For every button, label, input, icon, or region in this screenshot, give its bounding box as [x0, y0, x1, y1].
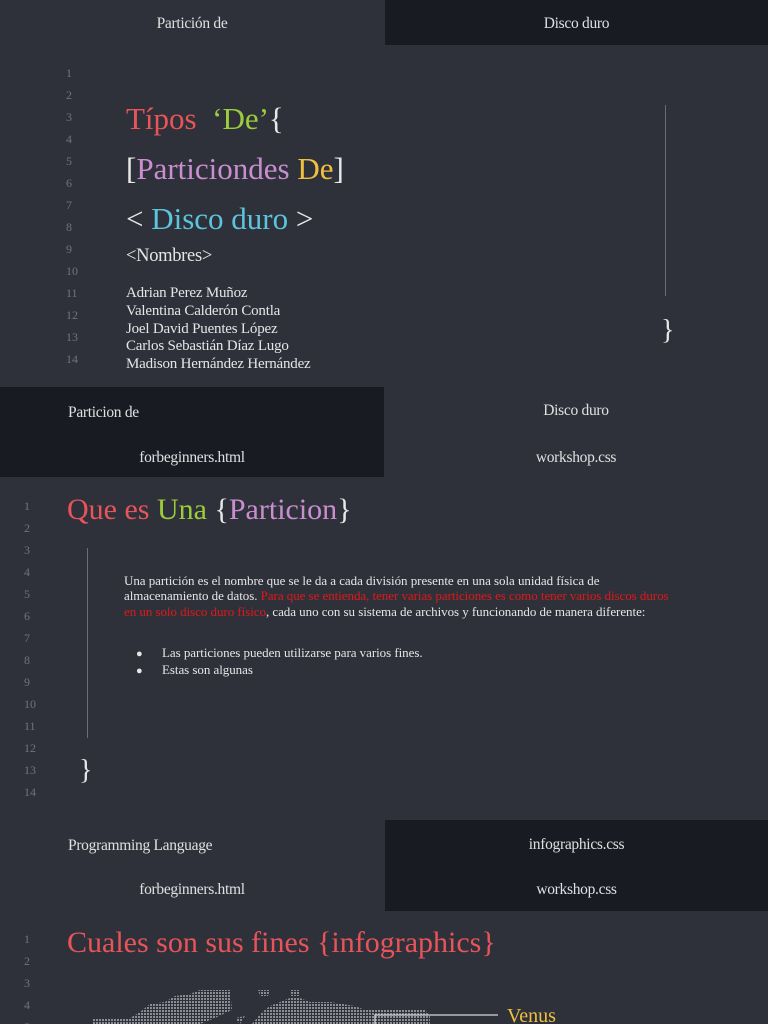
tab: Partición de: Partición de [157, 15, 227, 32]
line numbers: section 2: 3 [24, 543, 30, 557]
line numbers: section 2: 6 [24, 609, 30, 623]
line numbers: section 3 [24, 932, 30, 1024]
tab: Disco duro [385, 0, 768, 45]
closing brace: } [661, 315, 674, 346]
line numbers: section 2: 7 [24, 631, 30, 645]
tab: Programming Language: forbeginners.html [139, 881, 245, 898]
title block: Tipos de particiones: < Disco duro > [126, 201, 313, 236]
tab: Programming Language: Programming Language [68, 837, 212, 854]
line numbers: section 1: 11 [66, 286, 78, 300]
tab: Disco duro [536, 402, 616, 466]
line numbers: section 2: 1 [24, 499, 30, 513]
bullet list: ● [136, 665, 143, 677]
line numbers: section 1: 2 [66, 88, 72, 102]
line numbers: section 1: 9 [66, 242, 72, 256]
line numbers: section 1: 1 [66, 66, 72, 80]
tab: infographics.css [385, 820, 768, 911]
tab bar: top [157, 0, 768, 45]
tab: Particion de [0, 387, 384, 477]
line numbers: section 2: 4 [24, 565, 30, 579]
line numbers: section 3: 3 [24, 976, 30, 990]
tab: infographics.css: infographics.css [529, 836, 624, 853]
text block: definition: en un solo disco duro físico, cada uno con su sistema de archivos y funcionando de manera diferente: [124, 604, 645, 619]
line numbers: section 3: 1 [24, 932, 30, 946]
text block: names: Valentina Calderón Contla [126, 303, 280, 319]
line numbers: section 1: 10 [66, 264, 78, 278]
title: Que es una particion: Que es Una {Particion} [67, 493, 352, 526]
bullet list: Las particiones pueden utilizarse para varios fines. [162, 645, 423, 660]
tab: Programming Language [68, 837, 245, 898]
tab bar: middle 2 [68, 820, 768, 911]
title block: Tipos de particiones [126, 101, 344, 236]
line numbers: section 2: 13 [24, 763, 36, 777]
text block: names: Joel David Puentes López [126, 321, 277, 337]
tab: infographics.css: workshop.css [536, 881, 617, 898]
bullet list: ● [136, 648, 143, 660]
line numbers: section 2: 11 [24, 719, 36, 733]
line numbers: section 1: 7 [66, 198, 72, 212]
line numbers: section 2: 5 [24, 587, 30, 601]
tab: Particion de: forbeginners.html [139, 449, 245, 466]
line numbers: section 1: 14 [66, 352, 78, 366]
line numbers: section 2: 9 [24, 675, 30, 689]
line numbers: section 2: 8 [24, 653, 30, 667]
line numbers: section 1 [66, 66, 78, 366]
tab: Disco duro: Disco duro [544, 15, 609, 32]
line numbers: section 3: 2 [24, 954, 30, 968]
title: Cuales son sus fines: Cuales son sus fines {infographics} [67, 926, 496, 959]
tab: Disco duro: workshop.css [536, 449, 616, 466]
title block: Tipos de particiones: [Particiondes De] [126, 151, 344, 186]
tab: Disco duro: Disco duro [543, 402, 609, 419]
title block: Tipos de particiones: Típos ‘De’{ [126, 101, 284, 136]
text block: names [126, 285, 311, 372]
bullet list [136, 645, 423, 677]
text block: definition: Una partición es el nombre que se le da a cada división presente en una sola unidad física de [124, 573, 599, 588]
closing brace: } [79, 755, 92, 786]
line numbers: section 3: 4 [24, 998, 30, 1012]
line numbers: section 2: 10 [24, 697, 36, 711]
tab bar: middle 1 [0, 387, 616, 477]
heading: Nombres: <Nombres> [126, 246, 212, 266]
text block: definition [124, 573, 669, 619]
callout line: Venus [375, 1015, 498, 1024]
text block: names: Madison Hernández Hernández [126, 356, 311, 372]
line numbers: section 2: 14 [24, 785, 36, 799]
chart: dotted world map [93, 990, 498, 1024]
text block: names: Adrian Perez Muñoz [126, 285, 247, 301]
line numbers: section 1: 13 [66, 330, 78, 344]
tab: Particion de: Particion de [68, 404, 139, 421]
line numbers: section 2: 12 [24, 741, 36, 755]
bullet list: Estas son algunas [162, 662, 253, 677]
text block: names: Carlos Sebastián Díaz Lugo [126, 338, 289, 354]
line numbers: section 1: 3 [66, 110, 72, 124]
line numbers: section 1: 5 [66, 154, 72, 168]
line numbers: section 1: 8 [66, 220, 72, 234]
line numbers: section 1: 6 [66, 176, 72, 190]
text block: definition: almacenamiento de datos. Para que se entienda, tener varias particiones es como tener varios discos duros [124, 588, 669, 603]
line numbers: section 2: 2 [24, 521, 30, 535]
line numbers: section 2 [24, 499, 36, 799]
line numbers: section 1: 12 [66, 308, 78, 322]
line numbers: section 1: 4 [66, 132, 72, 146]
